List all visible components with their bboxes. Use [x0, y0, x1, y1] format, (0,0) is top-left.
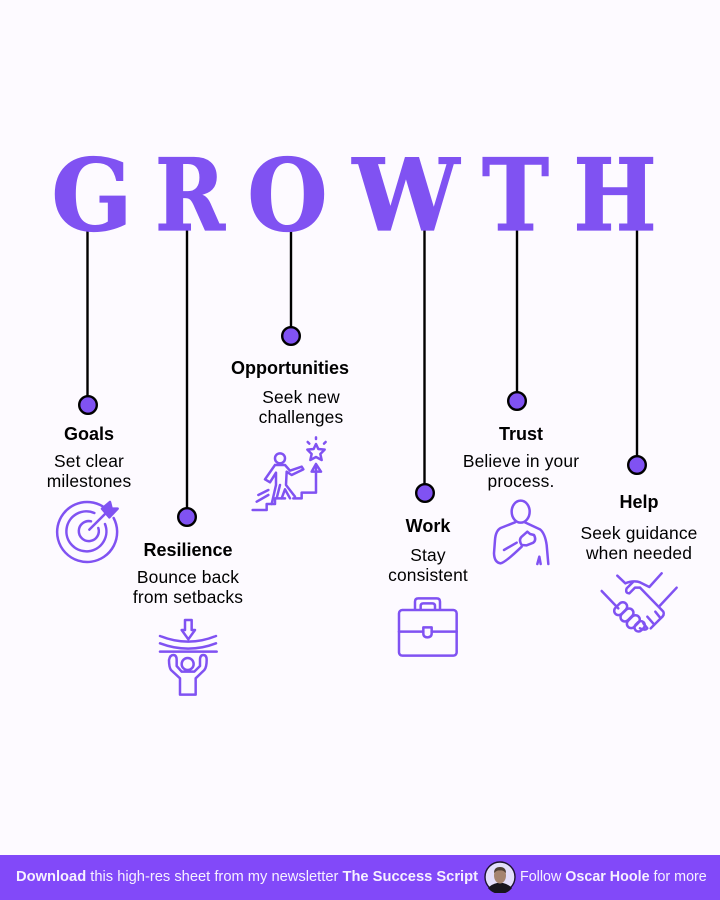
label: Resilience: from setbacks	[133, 587, 243, 607]
label: Work: consistent	[388, 565, 468, 585]
title: GROWTH: G	[51, 137, 133, 253]
icon: hand on heart	[494, 501, 548, 564]
label: Resilience: Resilience	[143, 540, 233, 560]
label: Goals: Set clear	[54, 451, 124, 471]
icon: briefcase	[399, 598, 457, 656]
label: Help: Seek guidance	[580, 523, 698, 543]
icon: handshake	[602, 573, 677, 633]
label: Goals	[47, 424, 131, 491]
title: GROWTH: T	[482, 138, 549, 254]
title: GROWTH: O	[247, 137, 328, 254]
label: Help: when needed	[586, 543, 692, 563]
label: Work	[388, 516, 468, 585]
label: Trust: process.	[488, 471, 554, 491]
label: Goals: milestones	[47, 471, 131, 491]
footer bar: Follow Oscar Hoole for more	[520, 869, 707, 885]
label: Work: Work	[406, 516, 450, 536]
avatar	[484, 861, 516, 893]
icon: climbing stairs to star	[253, 437, 326, 510]
label: Help	[580, 492, 698, 563]
footer bar	[0, 855, 720, 900]
title: GROWTH: W	[352, 137, 461, 253]
icon: resilience person under pressure	[160, 620, 217, 695]
text: Opportunities description: Seek new	[262, 387, 340, 407]
label: Help: Help	[619, 492, 658, 512]
label: Trust: Believe in your	[463, 451, 579, 471]
label: Trust	[463, 424, 579, 491]
title: GROWTH: R	[155, 137, 226, 254]
label: Opportunities heading: Opportunities	[231, 358, 349, 378]
label: Resilience: Bounce back	[137, 567, 239, 587]
title: GROWTH	[51, 137, 657, 254]
label: Work: Stay	[410, 545, 446, 565]
label: Goals: Goals	[64, 424, 114, 444]
text: Opportunities description	[259, 387, 343, 427]
text: Opportunities description: challenges	[259, 407, 343, 427]
footer bar: Download this high-res sheet from my newsletter The Success Script	[16, 869, 478, 885]
label: Resilience	[133, 540, 243, 607]
label: Trust: Trust	[499, 424, 543, 444]
title: GROWTH: H	[573, 138, 657, 254]
icon: target with arrow	[57, 502, 118, 562]
connector lines and dots	[79, 230, 646, 526]
